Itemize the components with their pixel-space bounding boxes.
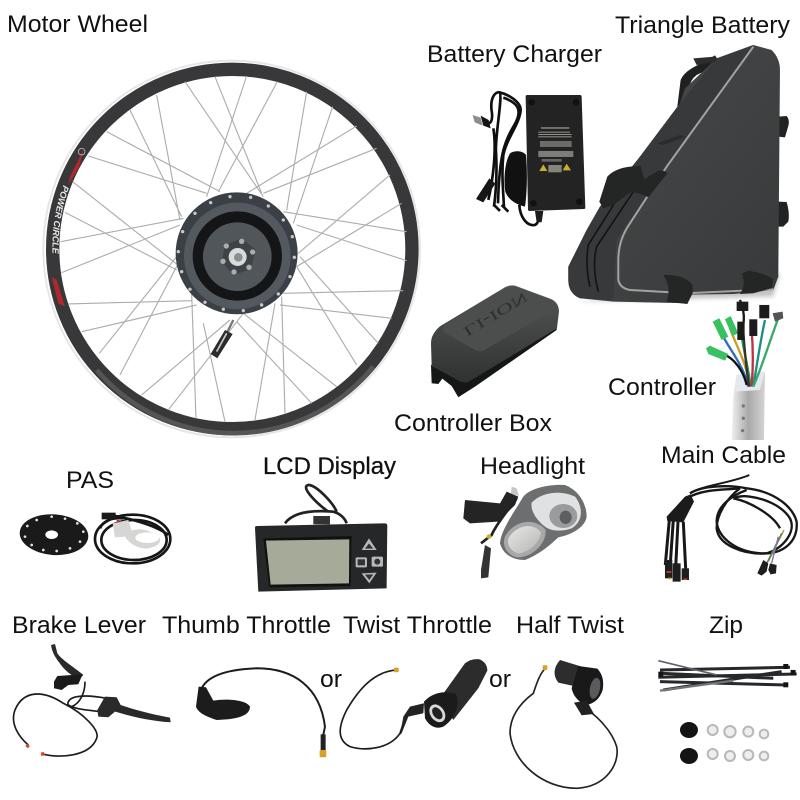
zip ties and screws <box>658 661 797 764</box>
label: Zip: Zip <box>709 612 743 639</box>
lower right products <box>340 475 797 788</box>
label: Half Twist: Half Twist <box>516 612 624 639</box>
label: PAS: PAS <box>66 467 114 494</box>
label: Motor Wheel: Motor Wheel <box>7 11 148 38</box>
wheel rim: POWER CIRCLE <box>52 185 69 254</box>
motor axle cable <box>211 320 233 358</box>
controller box <box>431 285 559 397</box>
wheel spokes <box>61 76 407 422</box>
middle and lower left products <box>14 485 387 757</box>
label: Controller Box: Controller Box <box>394 410 552 437</box>
label: Headlight: Headlight <box>480 453 585 480</box>
controller with wires <box>706 300 783 440</box>
label: or (between twist and half twist): or <box>489 666 511 693</box>
top right products <box>431 45 789 440</box>
label: LCD Display: LCD Display <box>263 453 397 480</box>
headlight <box>463 485 587 578</box>
label: Main Cable: Main Cable <box>661 442 786 469</box>
controller box: LI-ION <box>460 288 530 338</box>
main cable <box>665 475 797 582</box>
battery charger <box>473 92 585 225</box>
label: or (between thumb and twist): or <box>320 666 342 693</box>
wheel rim <box>42 60 421 438</box>
label: Twist Throttle: Twist Throttle <box>343 612 492 639</box>
twist throttle <box>340 659 487 749</box>
PAS sensor disc and cable <box>18 512 170 563</box>
brake levers <box>14 644 171 756</box>
label: Triangle Battery: Triangle Battery <box>615 12 791 39</box>
thumb throttle <box>196 668 326 757</box>
half twist throttle <box>510 660 617 788</box>
triangle battery bag <box>568 45 789 304</box>
label: Battery Charger: Battery Charger <box>427 41 602 68</box>
LCD display unit <box>255 485 387 592</box>
label: Controller: Controller <box>608 374 716 401</box>
motor wheel <box>42 60 421 438</box>
label: Brake Lever: Brake Lever <box>12 612 146 639</box>
label: Thumb Throttle: Thumb Throttle <box>162 612 331 639</box>
motor hub <box>176 192 298 314</box>
